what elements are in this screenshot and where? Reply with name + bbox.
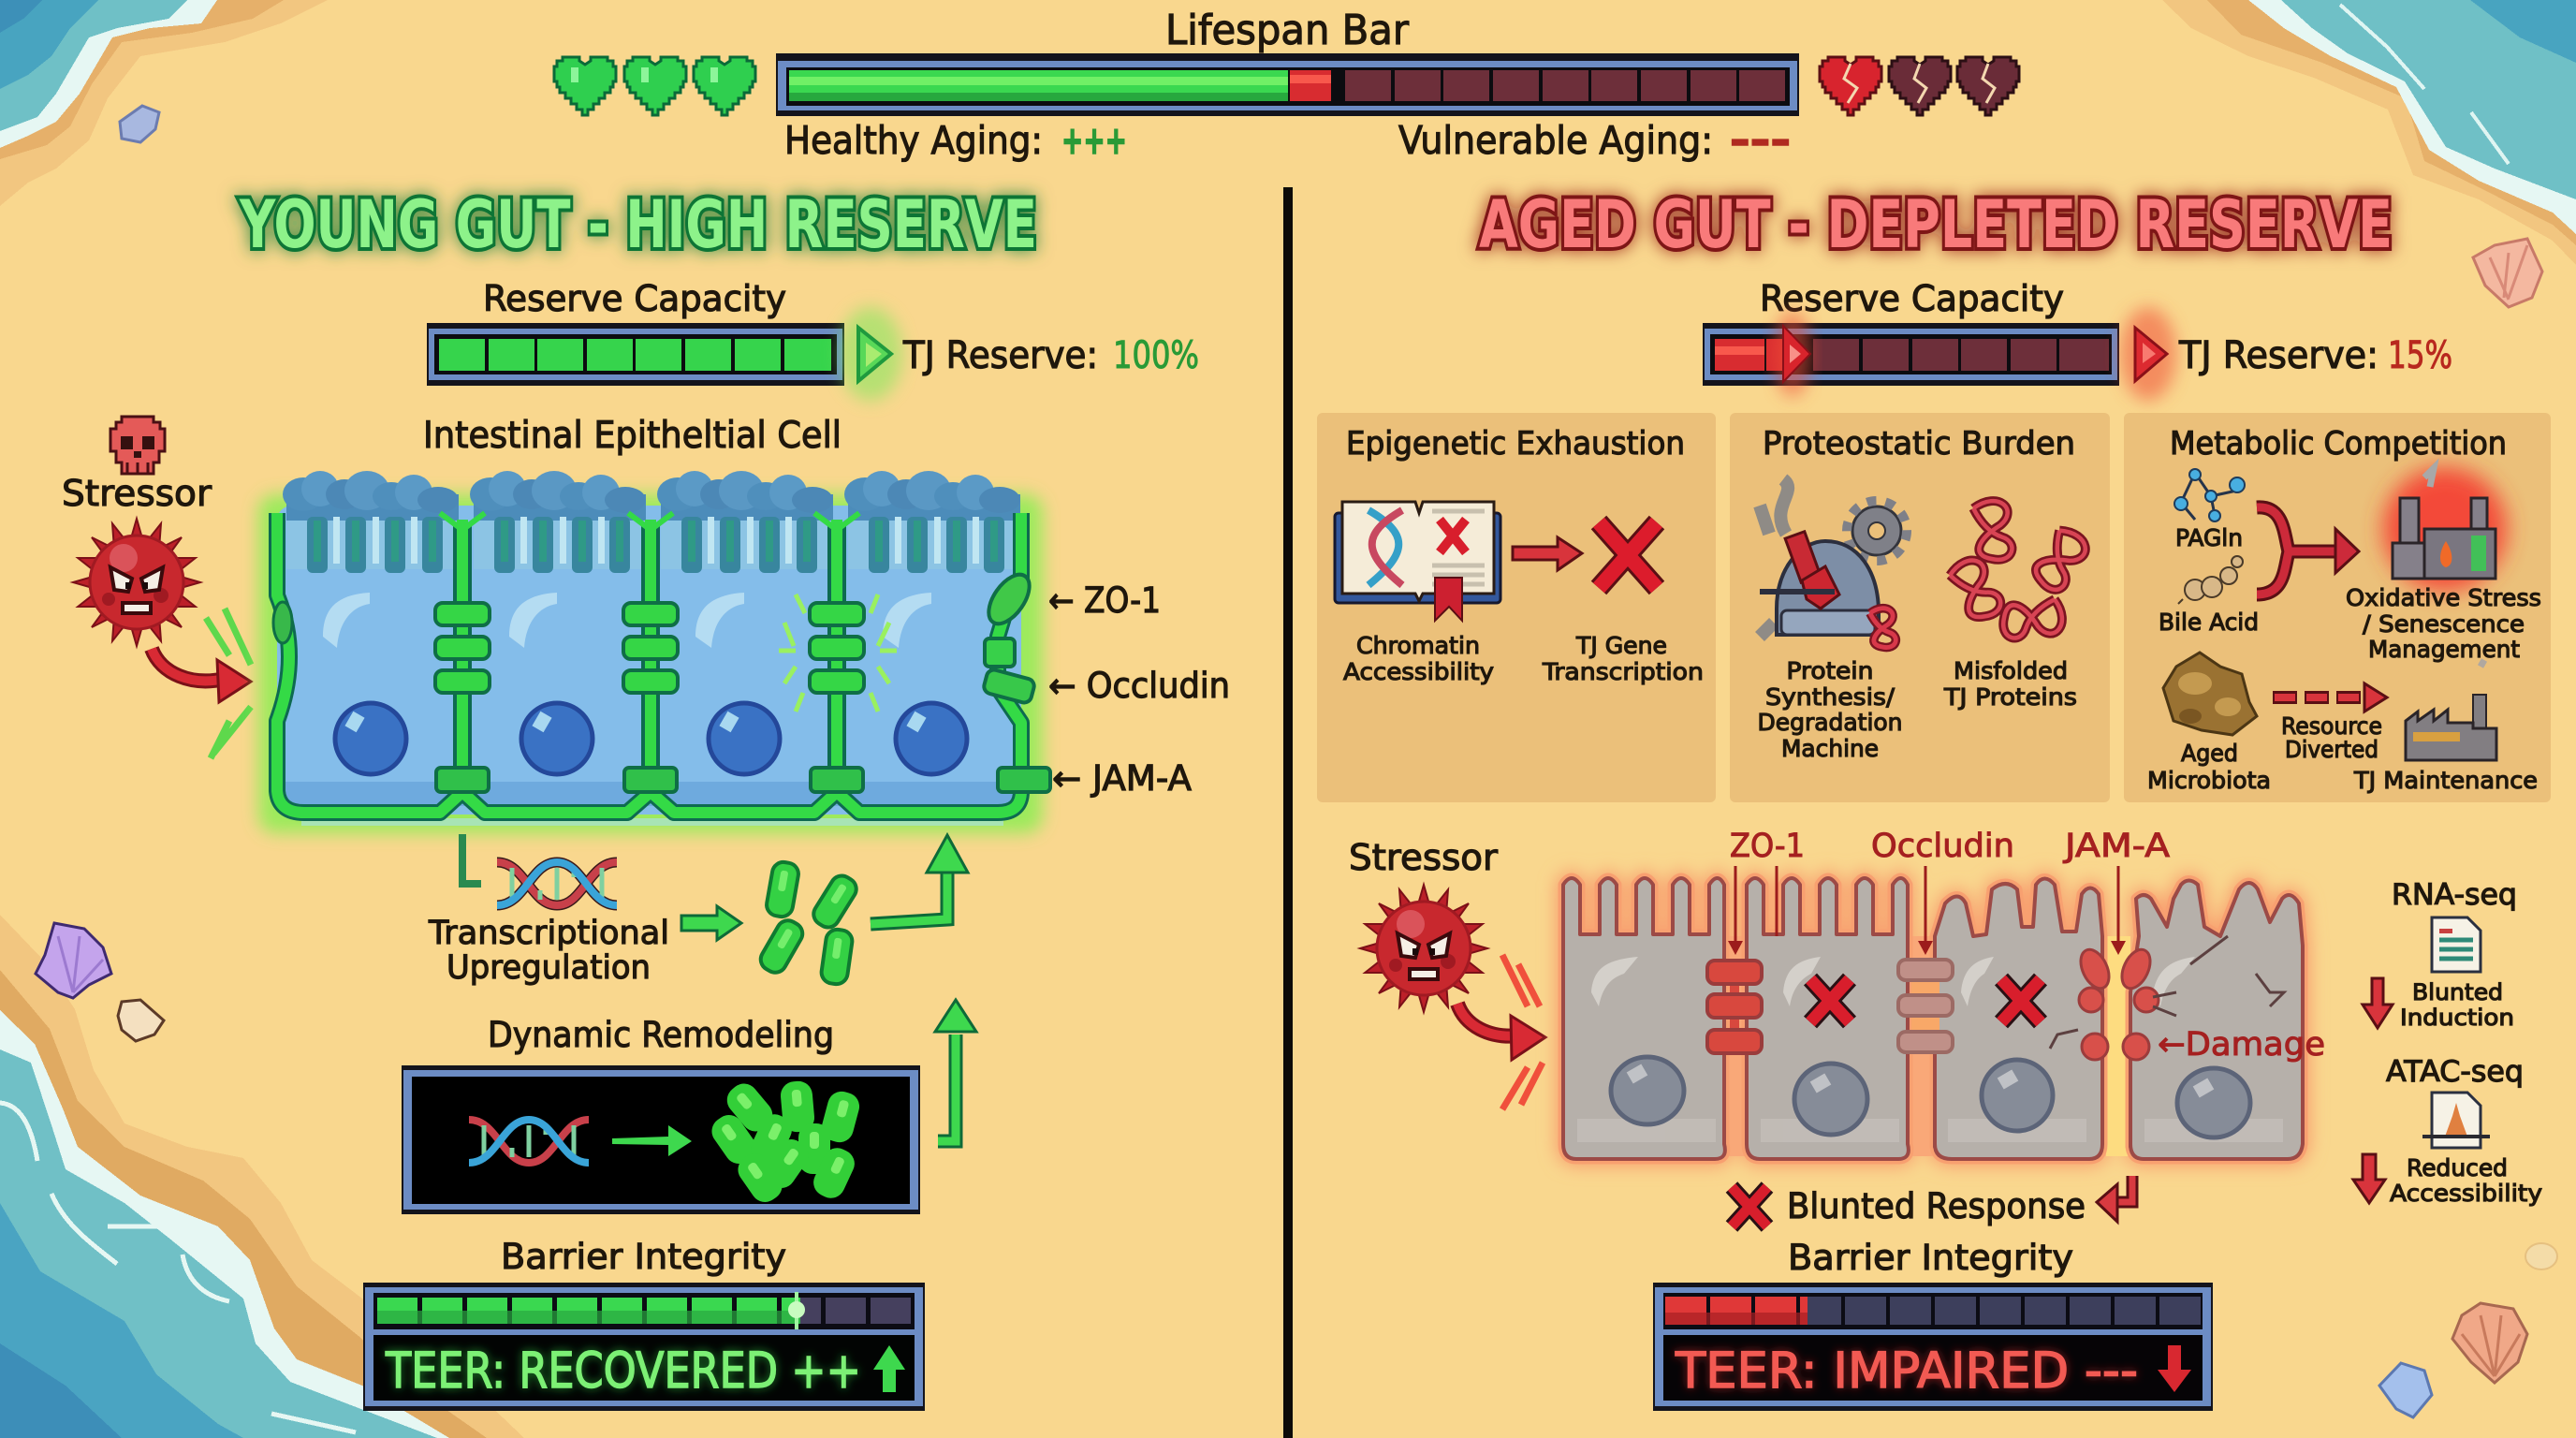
decoration: beige shell xyxy=(118,1000,164,1041)
aged reserve capacity label: Reserve Capacity xyxy=(1760,278,2064,319)
decoration: blue shell bottom-right xyxy=(2379,1363,2432,1417)
healthy aging label: Healthy Aging: xyxy=(784,118,1043,163)
caption xyxy=(2390,1154,2542,1207)
decoration: faint shell right xyxy=(2525,1243,2557,1269)
misfolded label: Misfolded xyxy=(1954,657,2068,684)
machine label: Machine xyxy=(1781,735,1879,762)
arrow: remodeling feedback xyxy=(935,1000,976,1141)
microbiota label: Aged xyxy=(2181,740,2238,767)
aged label: JAM-A xyxy=(2063,828,2170,955)
label: ZO-1: ← ZO-1 xyxy=(1048,580,1161,621)
dynamic remodeling label: Dynamic Remodeling xyxy=(488,1015,834,1055)
panel: metabolic competition xyxy=(2124,413,2551,802)
hook arrow xyxy=(2117,1176,2132,1202)
stressor label aged: Stressor xyxy=(1349,837,1498,878)
TEER text: TEER: IMPAIRED --- xyxy=(1675,1343,2138,1400)
aged label: ZO-1: ZO-1 xyxy=(1730,828,1805,865)
TJ gene label: Transcription xyxy=(1542,658,1704,685)
vulnerable aging label: Vulnerable Aging: xyxy=(1398,118,1713,163)
outer membrane xyxy=(277,513,1021,813)
down arrow xyxy=(2363,978,2393,1028)
microbiota label xyxy=(2147,740,2271,794)
damage label: ←Damage xyxy=(2158,1026,2325,1064)
icon: open book xyxy=(1335,502,1500,621)
decoration: purple shell xyxy=(36,923,111,998)
misfolded label xyxy=(1943,657,2077,711)
aged label: occludin: Occludin xyxy=(1871,828,2014,865)
aged label: JAM-A: JAM-A xyxy=(2063,828,2170,865)
TJ gene label xyxy=(1542,632,1704,685)
barrier integrity label young: Barrier Integrity xyxy=(501,1237,786,1277)
young cell title: Intestinal Epitheltial Cell xyxy=(423,415,842,457)
glow halo xyxy=(258,494,1043,833)
transcriptional upregulation label xyxy=(428,915,669,987)
oxidative label: / Senescence xyxy=(2363,610,2525,638)
resource diverted label: Resource xyxy=(2281,712,2382,740)
arrow xyxy=(612,1125,692,1156)
up arrow xyxy=(873,1345,905,1392)
label: Occludin: ← Occludin xyxy=(1048,666,1230,706)
oxidative label: Oxidative Stress xyxy=(2346,584,2541,611)
red segment xyxy=(1290,70,1331,101)
caption: Induction xyxy=(2400,1005,2514,1031)
down arrow xyxy=(2158,1345,2191,1392)
occludin junctions xyxy=(1898,960,1953,1052)
misfolded label: TJ Proteins xyxy=(1943,683,2077,711)
depleted segments xyxy=(1345,70,1785,101)
cell lower shade xyxy=(1577,1119,2283,1142)
resource diverted label xyxy=(2281,712,2382,763)
arrow: resource diverted xyxy=(2273,683,2387,712)
TEER text: TEER: RECOVERED ++ xyxy=(385,1343,861,1400)
orange rim xyxy=(1563,878,2303,1159)
panel: dynamic remodeling xyxy=(402,1065,920,1214)
stressor label young: Stressor xyxy=(62,473,212,514)
caption: Accessibility xyxy=(2390,1180,2542,1207)
damaged side proteins xyxy=(273,567,1037,704)
title: Metabolic Competition xyxy=(2170,425,2507,462)
caption: Reduced xyxy=(2407,1154,2508,1181)
blunted response row xyxy=(1732,1176,2132,1226)
icon: burning factory xyxy=(2383,467,2507,591)
icon: virus young xyxy=(73,519,200,646)
resource diverted label: Diverted xyxy=(2285,736,2378,763)
arrow: proteins to membrane xyxy=(871,835,968,924)
green hearts xyxy=(554,57,755,115)
gap tint xyxy=(1728,936,1747,1156)
ZO-1 junctions xyxy=(1707,961,1762,1053)
machine label: Synthesis/ xyxy=(1765,683,1895,711)
arrow: merging metabolites xyxy=(2257,507,2359,594)
icon: aged microbiota xyxy=(2163,653,2257,735)
halo xyxy=(1563,878,2303,1159)
transcriptional upregulation label: Upregulation xyxy=(446,949,651,987)
arrow xyxy=(1513,537,1582,570)
beach: bottom-left shoreline xyxy=(0,915,524,1438)
decoration: pink shell bottom-right xyxy=(2452,1303,2527,1383)
nuclei xyxy=(1611,1057,2250,1137)
title: Proteostatic Burden xyxy=(1763,425,2075,462)
nuclei xyxy=(335,703,967,774)
document icon xyxy=(2422,1093,2490,1148)
text: Blunted Response xyxy=(1787,1186,2086,1226)
arrow: stressor hits aged cell xyxy=(1457,1004,1545,1060)
oxidative label: Management xyxy=(2368,636,2520,663)
machine label: Degradation xyxy=(1758,709,1902,736)
green protein rods xyxy=(756,860,860,986)
icon: virus aged xyxy=(1360,885,1487,1012)
decoration: pink shell top-right xyxy=(2473,239,2542,307)
ATAC-seq block xyxy=(2353,1055,2542,1207)
machine label xyxy=(1758,657,1902,762)
panel: TEER impaired xyxy=(1653,1283,2213,1411)
aged label: ZO-1 xyxy=(1728,828,1805,955)
caption: Blunted xyxy=(2412,979,2503,1005)
heading: young gut: YOUNG GUT - HIGH RESERVE xyxy=(239,186,1037,263)
TJ maintenance label: TJ Maintenance xyxy=(2353,767,2538,794)
repair sparkle xyxy=(779,594,897,712)
chromatin label: Accessibility xyxy=(1343,658,1494,685)
chromatin label xyxy=(1343,632,1494,685)
microvilli xyxy=(283,471,1020,573)
icon: stalled machine xyxy=(1760,479,1907,648)
arrow: stressor hits young cell xyxy=(152,649,251,702)
lower cytoplasm band xyxy=(283,782,1016,806)
panel: TEER recovered xyxy=(363,1283,925,1411)
broken hearts xyxy=(1820,57,2019,115)
document icon xyxy=(2432,917,2481,972)
icon: DNA young xyxy=(497,862,617,905)
tight junction proteins xyxy=(435,603,1050,792)
microbiota label: Microbiota xyxy=(2147,767,2271,794)
protein cluster xyxy=(707,1078,862,1208)
lifespan bar xyxy=(776,53,1799,116)
aged TJ reserve readout: 15% xyxy=(2388,334,2452,377)
icon: bile acid molecule xyxy=(2178,556,2243,604)
barrier segments xyxy=(1665,1297,2201,1325)
pale basal band xyxy=(301,818,1003,826)
aged reserve marker xyxy=(2120,307,2176,401)
young TJ reserve readout: 100% xyxy=(1113,334,1199,377)
machine label: Protein xyxy=(1786,657,1874,684)
epithelial cell layer young xyxy=(258,471,1050,833)
epithelial cell layer aged xyxy=(1563,878,2303,1159)
PAGln label: PAGln xyxy=(2175,524,2243,551)
cell highlights xyxy=(1591,957,2195,1006)
arrow: transcription to proteins xyxy=(681,906,741,940)
icon: misfolded proteins xyxy=(1947,501,2094,638)
highlights xyxy=(323,593,931,648)
impact sparks aged xyxy=(1502,955,1543,1109)
X icon xyxy=(1732,1187,1767,1226)
caption xyxy=(2400,979,2514,1031)
transcriptional upregulation label: Transcriptional xyxy=(428,915,669,952)
lifespan title: Lifespan Bar xyxy=(1165,7,1410,54)
cell cytoplasm xyxy=(277,506,1021,814)
chromatin label: Chromatin xyxy=(1356,632,1480,659)
vulnerable aging label: --- xyxy=(1730,118,1791,163)
title: Epigenetic Exhaustion xyxy=(1346,425,1685,462)
bile acid label: Bile Acid xyxy=(2159,609,2259,636)
icon: skull xyxy=(110,417,165,474)
connector from membrane to DNA xyxy=(462,834,481,884)
title: ATAC-seq xyxy=(2386,1055,2524,1089)
aged TJ reserve readout: TJ Reserve: xyxy=(2178,334,2378,377)
spark marker xyxy=(788,1292,805,1329)
lateral junction walls xyxy=(440,513,859,791)
barrier segments xyxy=(377,1298,911,1324)
aged reserve bar xyxy=(1703,311,2119,397)
barrier integrity label aged: Barrier Integrity xyxy=(1788,1238,2073,1278)
cracks xyxy=(2050,936,2284,1049)
icon: idle factory xyxy=(2406,660,2496,760)
young TJ reserve readout: TJ Reserve: xyxy=(902,334,1098,377)
panel: proteostatic burden xyxy=(1730,413,2110,802)
green fill xyxy=(789,70,1288,101)
beach: top-left shoreline xyxy=(0,0,328,206)
decoration: blue pebble top-left xyxy=(120,106,159,142)
TJ gene label: TJ Gene xyxy=(1575,632,1667,659)
JAM-A damaged junctions xyxy=(2075,946,2159,1060)
DNA xyxy=(469,1120,589,1163)
RNA-seq block xyxy=(2363,878,2517,1031)
big X xyxy=(1599,522,1657,588)
down arrow xyxy=(2353,1154,2385,1203)
panel: epigenetic exhaustion xyxy=(1317,413,1716,802)
young reserve capacity label: Reserve Capacity xyxy=(483,278,786,319)
beach: top-right shoreline xyxy=(2162,0,2576,265)
label: JAM-A: ← JAM-A xyxy=(1052,758,1192,799)
cell bodies xyxy=(1563,878,2303,1159)
icon: PAGln molecule xyxy=(2174,469,2245,521)
young reserve marker xyxy=(839,307,902,401)
aged label: occludin xyxy=(1871,828,2014,955)
healthy aging label: +++ xyxy=(1061,118,1127,163)
oxidative label xyxy=(2346,584,2541,663)
title: RNA-seq xyxy=(2392,878,2517,912)
center divider xyxy=(1283,187,1293,1438)
young reserve bar xyxy=(427,323,844,386)
impact sparks young xyxy=(206,609,251,758)
red X marks xyxy=(1810,979,2041,1022)
